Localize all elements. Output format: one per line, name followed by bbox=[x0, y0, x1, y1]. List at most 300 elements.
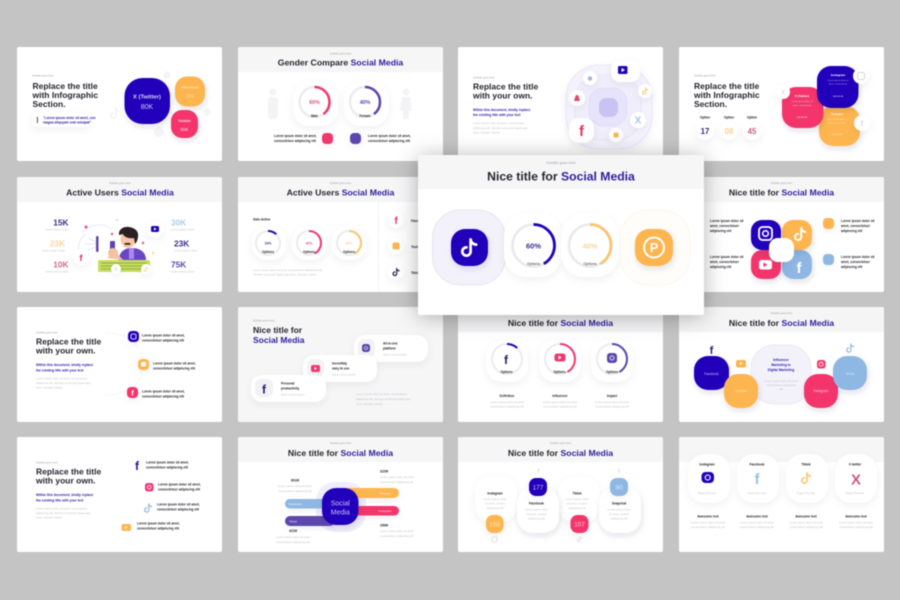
ring 40% pink: 40% bbox=[306, 242, 312, 246]
bubble: Youtube: 60K bbox=[180, 127, 189, 132]
card: facebook: Facebook bbox=[529, 502, 544, 506]
text: left bottom: adipiscing elit bbox=[710, 265, 732, 269]
icon: facebook bubble: f bbox=[79, 253, 83, 264]
tile: pinterest: P bbox=[650, 241, 658, 255]
ring 10% bbox=[252, 226, 286, 260]
heading: Section. bbox=[32, 99, 66, 109]
blob: navy instagram: 10K 5K 3K bbox=[833, 96, 844, 98]
icon bubbles bbox=[776, 68, 870, 131]
card: tiktok: sit amet, consec bbox=[567, 502, 588, 506]
text: right bottom bbox=[841, 255, 875, 269]
right stats: Lorem ipsum dolor bbox=[171, 270, 194, 274]
center blob bbox=[751, 345, 811, 404]
accent text bbox=[473, 108, 530, 117]
card: tiktok: Enjoy Promote bbox=[797, 491, 816, 495]
bar: instagram: Instagram bbox=[378, 509, 392, 513]
caption 1: Awesome text bbox=[697, 514, 720, 518]
body text: adipiscing elit. Aenean commodo ligula eget bbox=[473, 126, 528, 130]
blob: navy instagram bbox=[817, 66, 858, 108]
badge: 107 bbox=[570, 515, 588, 533]
card: x twitter: X twitter bbox=[849, 462, 862, 466]
blob: instagram bbox=[804, 374, 838, 408]
text: male note: consectetuer adipiscing elit bbox=[274, 139, 317, 143]
accent text bbox=[36, 493, 93, 502]
body text: adipiscing elit. Aenean commodo ligula eget bbox=[356, 397, 411, 401]
badge: 107: 107 bbox=[574, 522, 585, 528]
card: instagram: adipiscing elit bbox=[487, 506, 504, 510]
card: instagram: Instagram bbox=[487, 492, 503, 496]
blob: orange youtube bbox=[819, 106, 860, 146]
options: Option bbox=[747, 116, 757, 120]
card: x twitter: X bbox=[851, 472, 861, 488]
card: facebook: Lorem ipsum dolor bbox=[525, 508, 548, 512]
card: snapchat: Snapchat bbox=[612, 502, 627, 506]
stat: bottom left: Lorem ipsum dolor sit amet bbox=[276, 535, 310, 539]
list item: youtube: consectetuer adipiscing elit bbox=[137, 526, 180, 530]
bar: tiktok bbox=[285, 516, 335, 526]
options bbox=[696, 116, 761, 140]
subtitle: Subtitle goes here bbox=[473, 76, 495, 80]
list item 1: Lorem ipsum dolor sit amet, bbox=[142, 334, 185, 338]
card: facebook: Enjoy Promote bbox=[748, 491, 767, 495]
caption: influencer: consectetuer adipiscing elit bbox=[543, 404, 577, 408]
stat: top right bbox=[380, 470, 414, 484]
body text: Lorem ipsum dolor sit amet, consectetuer adipiscing elit. bbox=[253, 268, 323, 272]
blob: tiktok bbox=[833, 356, 867, 390]
icon: youtube bubble bbox=[146, 220, 164, 238]
left stats: Lorem ipsum dolor bbox=[45, 270, 69, 274]
blob: youtube bbox=[724, 374, 758, 408]
bar: tiktok: Tiktok bbox=[289, 520, 297, 524]
panel: slide 3 orbit icons bbox=[458, 47, 663, 161]
pill: all-in-one bbox=[354, 335, 428, 362]
text: right bottom: adipiscing elit bbox=[841, 265, 863, 269]
left stats: 10K bbox=[53, 260, 68, 270]
icon: youtube tile bbox=[751, 250, 781, 279]
card: tiktok: Tiktok bbox=[801, 462, 811, 466]
caption 2 bbox=[740, 514, 774, 529]
ring: definition: Options bbox=[500, 370, 513, 374]
stat: bottom left: 421M bbox=[289, 529, 297, 533]
subtitle: Subtitle goes here bbox=[694, 74, 716, 78]
list item: facebook: Lorem ipsum dolor sit amet, bbox=[146, 460, 189, 464]
title: Nice title for Social Media bbox=[729, 318, 834, 328]
caption 3: Lorem ipsum dolor sit amet bbox=[789, 520, 823, 524]
icon: tiktok tile bbox=[782, 220, 812, 250]
ring 40% orange bbox=[332, 226, 366, 260]
icon: X bubble: X bbox=[635, 116, 642, 126]
blob: tiktok: Tiktok bbox=[846, 372, 855, 376]
list item: youtube bbox=[122, 522, 180, 531]
caption 4 bbox=[839, 514, 873, 529]
ring: 40%: 40% bbox=[582, 242, 598, 250]
pill: incredibly easy: Incredibly bbox=[332, 362, 347, 366]
halo bbox=[316, 482, 366, 532]
center blob: consectetuer adipiscing bbox=[766, 383, 796, 387]
subtitle: Subtitle goes here bbox=[32, 74, 54, 78]
card: instagram: sit amet, consec bbox=[485, 502, 506, 506]
stat: top left bbox=[278, 478, 312, 493]
list item 2: consectetuer adipiscing elit bbox=[153, 366, 196, 370]
blob: facebook bbox=[694, 356, 729, 390]
quote card: magna aliquyam erat volutpat" bbox=[43, 120, 92, 124]
list item 2 bbox=[138, 359, 196, 370]
ghost icons bbox=[111, 72, 210, 137]
header band bbox=[679, 437, 884, 462]
center social media tile: Media bbox=[331, 510, 350, 516]
badge: 177 bbox=[529, 478, 547, 496]
body text: Lorem ipsum dolor sit amet, consectetuer bbox=[36, 376, 87, 380]
heading: Replace the title bbox=[36, 336, 101, 346]
panel: slide 8 four icons bbox=[679, 177, 884, 292]
blob: orange youtube: Youtube bbox=[831, 112, 843, 116]
center blob: Influencer bbox=[773, 358, 790, 362]
text: left top: Lorem ipsum dolor sit bbox=[710, 219, 744, 223]
icon: instagram tile bbox=[751, 220, 781, 250]
text: right top bbox=[841, 219, 875, 233]
heading: with your own. bbox=[35, 346, 96, 356]
caption 2: consectetuer adipiscing elit bbox=[740, 525, 774, 529]
list item: tiktok bbox=[145, 502, 200, 512]
icon: youtube bbox=[736, 360, 746, 368]
stat: bottom right: Lorem ipsum dolor sit amet bbox=[380, 529, 414, 533]
caption 3: Awesome text bbox=[795, 514, 818, 518]
badge: 177: 177 bbox=[533, 484, 544, 492]
title: Nice title for Social Media bbox=[729, 188, 834, 198]
blob: orange youtube: Lorem ipsum dolor sit bbox=[827, 118, 848, 121]
panel: slide 2 gender compare bbox=[238, 47, 443, 161]
stat: bottom left bbox=[276, 529, 310, 544]
panel: slide 11 three rings bbox=[458, 307, 663, 422]
ring: definition bbox=[486, 340, 528, 382]
icon: orange bubble bbox=[609, 128, 623, 142]
left stats: Lorem ipsum dolor bbox=[45, 228, 69, 232]
bubble: Facebook: Facebook bbox=[181, 86, 200, 90]
header band bbox=[679, 307, 884, 332]
icon: bell bubble bbox=[569, 90, 585, 106]
ring 10%: Options bbox=[262, 250, 274, 254]
list item 1: consectetuer adipiscing elit bbox=[142, 338, 185, 342]
bubble: X Twitter: X (Twitter) bbox=[133, 94, 161, 100]
caption: impact bbox=[595, 394, 629, 408]
bar: youtube bbox=[345, 488, 399, 498]
left stats bbox=[42, 218, 69, 274]
options: Option bbox=[724, 116, 734, 120]
center social media tile: Social bbox=[331, 500, 350, 508]
list labels: Tiktok bbox=[411, 271, 421, 275]
heading bbox=[693, 81, 760, 109]
list item 3: Lorem ipsum dolor sit amet, bbox=[142, 390, 185, 394]
pill: incredibly easy bbox=[303, 355, 377, 382]
caption 1: Lorem ipsum dolor sit amet bbox=[691, 520, 725, 524]
badge: 158: 158 bbox=[489, 522, 501, 528]
blob: navy instagram: Instagram bbox=[831, 73, 845, 77]
blob: navy instagram: Lorem ipsum dolor sit bbox=[828, 79, 849, 82]
accent text: the existing title with your text bbox=[36, 368, 84, 372]
text: male note bbox=[274, 134, 317, 143]
ring: female 40%: Female bbox=[360, 114, 371, 118]
bubble: Facebook: 25K bbox=[186, 94, 194, 98]
subtitle: Subtitle goes here bbox=[36, 330, 58, 334]
card: tiktok: adipiscing elit bbox=[569, 506, 586, 510]
icon: tiktok bubble bbox=[638, 84, 652, 98]
title: Nice title for Social Media bbox=[508, 448, 613, 458]
accent text bbox=[36, 363, 93, 372]
panel: slide 13 staggered list bbox=[17, 437, 222, 552]
text: left top: adipiscing elit bbox=[710, 229, 732, 233]
list icons: f bbox=[394, 216, 398, 227]
blob: pink x twitter: X (Twitter) bbox=[795, 94, 809, 98]
accent text: the existing title with your text bbox=[473, 113, 521, 117]
ring: 60% bbox=[504, 213, 562, 277]
card: snapchat: sit amet, consec bbox=[609, 512, 630, 516]
right stats: Lorem ipsum dolor bbox=[174, 248, 197, 252]
subtitle: Subtitle goes here bbox=[253, 318, 275, 322]
subtitle: Subtitle goes here bbox=[36, 460, 58, 464]
panel: slide 14 social media hub bbox=[238, 437, 443, 552]
panel: center featured slide bbox=[418, 155, 704, 315]
header band bbox=[238, 437, 443, 462]
title: Gender Compare Social Media bbox=[278, 58, 403, 68]
card: instagram: Enjoy Promote bbox=[698, 491, 717, 495]
options: 08 bbox=[725, 127, 734, 136]
bar: facebook: Facebook bbox=[288, 502, 302, 506]
panel: slide 16 platform cards bbox=[679, 437, 884, 552]
caption 4: Awesome text bbox=[845, 514, 868, 518]
bar: instagram bbox=[345, 506, 399, 516]
card: facebook bbox=[737, 454, 779, 503]
subtitle: Subtitle goes here bbox=[771, 181, 793, 185]
pill: personal productivity bbox=[251, 375, 326, 402]
options: 45 bbox=[748, 127, 757, 136]
ring: male 60% bbox=[293, 82, 338, 126]
blob: orange youtube: amet, consectetuer bbox=[828, 122, 847, 124]
heading: with your own. bbox=[472, 90, 532, 100]
icon: orange badge bbox=[823, 218, 834, 229]
badge: 90 bbox=[610, 478, 628, 496]
heading: Replace the title bbox=[36, 466, 101, 476]
header band bbox=[458, 437, 663, 462]
bar: facebook bbox=[285, 499, 335, 508]
list labels: Facebook bbox=[411, 219, 426, 223]
title: Nice title for Social Media bbox=[288, 448, 393, 458]
list labels bbox=[411, 219, 426, 275]
heading: with Infographic bbox=[693, 90, 760, 100]
illustration: person with megaphone bbox=[79, 219, 154, 272]
body text: adipiscing elit. Aenean commodo ligula eget bbox=[36, 511, 91, 515]
icon: bottom bubbles: X bbox=[114, 267, 118, 273]
caption: definition: Definition bbox=[500, 394, 514, 398]
center social media tile bbox=[322, 488, 358, 525]
badge: 90: 90 bbox=[615, 484, 623, 492]
text: right bottom: amet, consectetuer bbox=[841, 260, 871, 264]
caption: definition: Lorem ipsum dolor sit amet bbox=[490, 400, 524, 404]
blob: navy instagram: amet, consectetuer bbox=[829, 82, 848, 86]
stat: top right: Lorem ipsum dolor sit amet bbox=[380, 475, 414, 479]
panel: slide 6 active users rings bbox=[238, 177, 443, 292]
stat: bottom right: 259M bbox=[380, 524, 388, 528]
left stats: Lorem ipsum dolor bbox=[42, 248, 65, 252]
body text bbox=[473, 121, 528, 134]
card: snapchat: adipiscing elit bbox=[611, 516, 628, 520]
stat: bottom right: consectetuer adipiscing elit bbox=[380, 534, 414, 538]
ring: influencer bbox=[539, 340, 581, 382]
text: female note: Lorem ipsum dolor sit amet, bbox=[368, 134, 411, 138]
card: instagram: Instagram bbox=[699, 462, 715, 466]
card: tiktok bbox=[786, 454, 828, 503]
list item: instagram bbox=[145, 482, 201, 492]
divider bbox=[377, 202, 380, 292]
blob: facebook: Facebook bbox=[704, 372, 719, 376]
stat: top left: 601M bbox=[291, 478, 299, 482]
list item: tiktok: consectetuer adipiscing elit bbox=[157, 508, 200, 512]
center blob: Lorem ipsum dolor sit amet bbox=[764, 379, 798, 383]
header band bbox=[418, 155, 704, 189]
caption 3 bbox=[789, 514, 823, 529]
bubble: X Twitter: 80K bbox=[141, 104, 154, 111]
list item 1 bbox=[128, 331, 185, 342]
icon bubbles: f bbox=[861, 119, 864, 128]
caption: influencer: Lorem ipsum dolor sit amet bbox=[543, 400, 577, 404]
accent text: Within this document, kindly replace bbox=[473, 108, 530, 112]
caption 4: Lorem ipsum dolor sit amet bbox=[839, 520, 873, 524]
left stats: 15K bbox=[53, 218, 68, 228]
tile: tiktok bbox=[432, 210, 506, 285]
center blob: Marketing in bbox=[771, 363, 791, 367]
panel: slide 9 list bbox=[17, 307, 222, 422]
right stats bbox=[171, 218, 197, 274]
blob: pink x twitter bbox=[782, 87, 824, 128]
list item 3 bbox=[127, 387, 185, 398]
bar: youtube: Youtube bbox=[380, 492, 391, 496]
quote card bbox=[32, 112, 96, 127]
small icons: f bbox=[538, 469, 540, 475]
stat: top left: Lorem ipsum dolor sit amet bbox=[278, 484, 312, 488]
text: female note: consectetuer adipiscing elit bbox=[368, 139, 411, 143]
stat: bottom left: consectetuer adipiscing elit bbox=[276, 540, 310, 544]
body text: Aenean commodo ligula eget dolor. Aenean massa. bbox=[253, 272, 317, 276]
list item 2: Lorem ipsum dolor sit amet, bbox=[153, 362, 196, 366]
panel: slide 10 staggered pills bbox=[238, 307, 443, 422]
heading bbox=[35, 336, 101, 356]
card: instagram: Lorem ipsum dolor bbox=[483, 497, 507, 501]
pill: all-in-one: platform bbox=[383, 346, 396, 350]
heading: Nice title for bbox=[253, 325, 303, 335]
caption 4: consectetuer adipiscing elit bbox=[839, 525, 873, 529]
ring: definition: f bbox=[504, 353, 509, 367]
heading: Replace the title bbox=[694, 81, 759, 91]
heading: Replace the title bbox=[32, 81, 98, 91]
card: tiktok bbox=[558, 476, 600, 522]
body text bbox=[253, 268, 323, 276]
title: Nice title for Social Media bbox=[487, 170, 635, 184]
body text: dolor. Aenean massa. bbox=[36, 516, 63, 520]
header band bbox=[238, 177, 443, 202]
icon: facebook bubble bbox=[73, 249, 89, 265]
subtitle: Subtitle goes here bbox=[330, 441, 352, 445]
caption: definition: consectetuer adipiscing elit bbox=[490, 404, 524, 408]
icon: blue badge bbox=[823, 254, 834, 265]
icon: bottom bubbles bbox=[111, 264, 151, 274]
card: x twitter bbox=[835, 454, 877, 503]
body text: dolor. Aenean massa. bbox=[36, 386, 63, 390]
heading bbox=[35, 466, 101, 486]
blob: pink x twitter: 10K 5K 3K bbox=[797, 117, 808, 119]
list item 3: consectetuer adipiscing elit bbox=[142, 394, 185, 398]
ring: 40% bbox=[561, 213, 619, 277]
blob: pink x twitter: Lorem ipsum dolor sit bbox=[792, 100, 813, 103]
caption: influencer bbox=[543, 394, 577, 408]
ring 10%: 10% bbox=[265, 242, 271, 246]
list item: instagram: Lorem ipsum dolor sit amet, bbox=[158, 482, 201, 486]
title: Nice title for Social Media bbox=[508, 318, 613, 328]
bubble: Facebook bbox=[175, 76, 205, 106]
card: instagram bbox=[688, 454, 730, 503]
body text: Lorem ipsum dolor sit amet, consectetuer bbox=[356, 392, 407, 396]
pill: personal productivity: f bbox=[262, 382, 267, 396]
icon: facebook bubble: f bbox=[579, 123, 585, 140]
card: x twitter: Enjoy Promote bbox=[846, 491, 865, 495]
ring 40% pink: Options bbox=[303, 250, 315, 254]
card: facebook: sit amet, consec bbox=[526, 512, 547, 516]
icon bubbles: X bbox=[781, 90, 786, 96]
text: right top: amet, consectetuer bbox=[841, 224, 871, 228]
blob: pink x twitter: amet, consectetuer bbox=[793, 104, 812, 107]
bubble: X Twitter bbox=[124, 78, 170, 124]
stat: top right: consectetuer adipiscing elit bbox=[380, 480, 414, 484]
icon: female figure bbox=[400, 88, 412, 119]
subtitle: Subtitle goes here bbox=[330, 181, 352, 185]
ring: impact bbox=[591, 340, 633, 382]
pill: personal productivity: Story Lorem Ipsum bbox=[281, 392, 305, 396]
center blob: Digital Marketing bbox=[768, 368, 794, 372]
panel: slide 1 replace the title bbox=[17, 47, 222, 161]
ring: male 60%: Male bbox=[311, 114, 318, 118]
panel: slide 5 active users illustration bbox=[17, 177, 222, 292]
caption: impact: Impact bbox=[607, 394, 618, 398]
list icons bbox=[388, 212, 404, 280]
list item: tiktok: Lorem ipsum dolor sit amet, bbox=[157, 502, 200, 506]
left stats: 23K bbox=[50, 238, 65, 248]
card: facebook: Facebook bbox=[750, 462, 765, 466]
icon: facebook: f bbox=[710, 345, 714, 357]
pill: all-in-one: Story Lorem Ipsum bbox=[383, 352, 407, 356]
small icons: X bbox=[617, 469, 621, 475]
list item: instagram: consectetuer adipiscing elit bbox=[158, 488, 201, 492]
small icons bbox=[492, 469, 621, 542]
subtitle: Subtitle goes here bbox=[330, 52, 352, 56]
options: 17 bbox=[701, 127, 709, 136]
connector arc bbox=[103, 333, 143, 395]
caption 2: Lorem ipsum dolor sit amet bbox=[740, 520, 774, 524]
panel: slide 12 influencer marketing bbox=[679, 307, 884, 422]
accent text: the existing title with your text bbox=[36, 498, 84, 502]
card: facebook: f bbox=[754, 471, 760, 488]
text: left top: amet, consectetuer bbox=[710, 224, 740, 228]
icon: facebook tile: f bbox=[796, 260, 802, 277]
caption: impact: Lorem ipsum dolor sit amet bbox=[595, 400, 629, 404]
list labels: Youtube bbox=[411, 245, 424, 249]
ring: impact: Options bbox=[606, 370, 618, 374]
caption 2: Awesome text bbox=[746, 514, 769, 518]
bubble: Youtube bbox=[171, 110, 198, 138]
subtitle: Subtitle goes here bbox=[109, 181, 131, 185]
body text: dolor. Aenean massa. bbox=[356, 402, 383, 406]
ring: 60%: Options bbox=[527, 262, 540, 266]
blob: youtube: Youtube bbox=[735, 389, 747, 393]
card: facebook bbox=[517, 487, 559, 533]
caption: influencer: Influencer bbox=[552, 394, 568, 398]
